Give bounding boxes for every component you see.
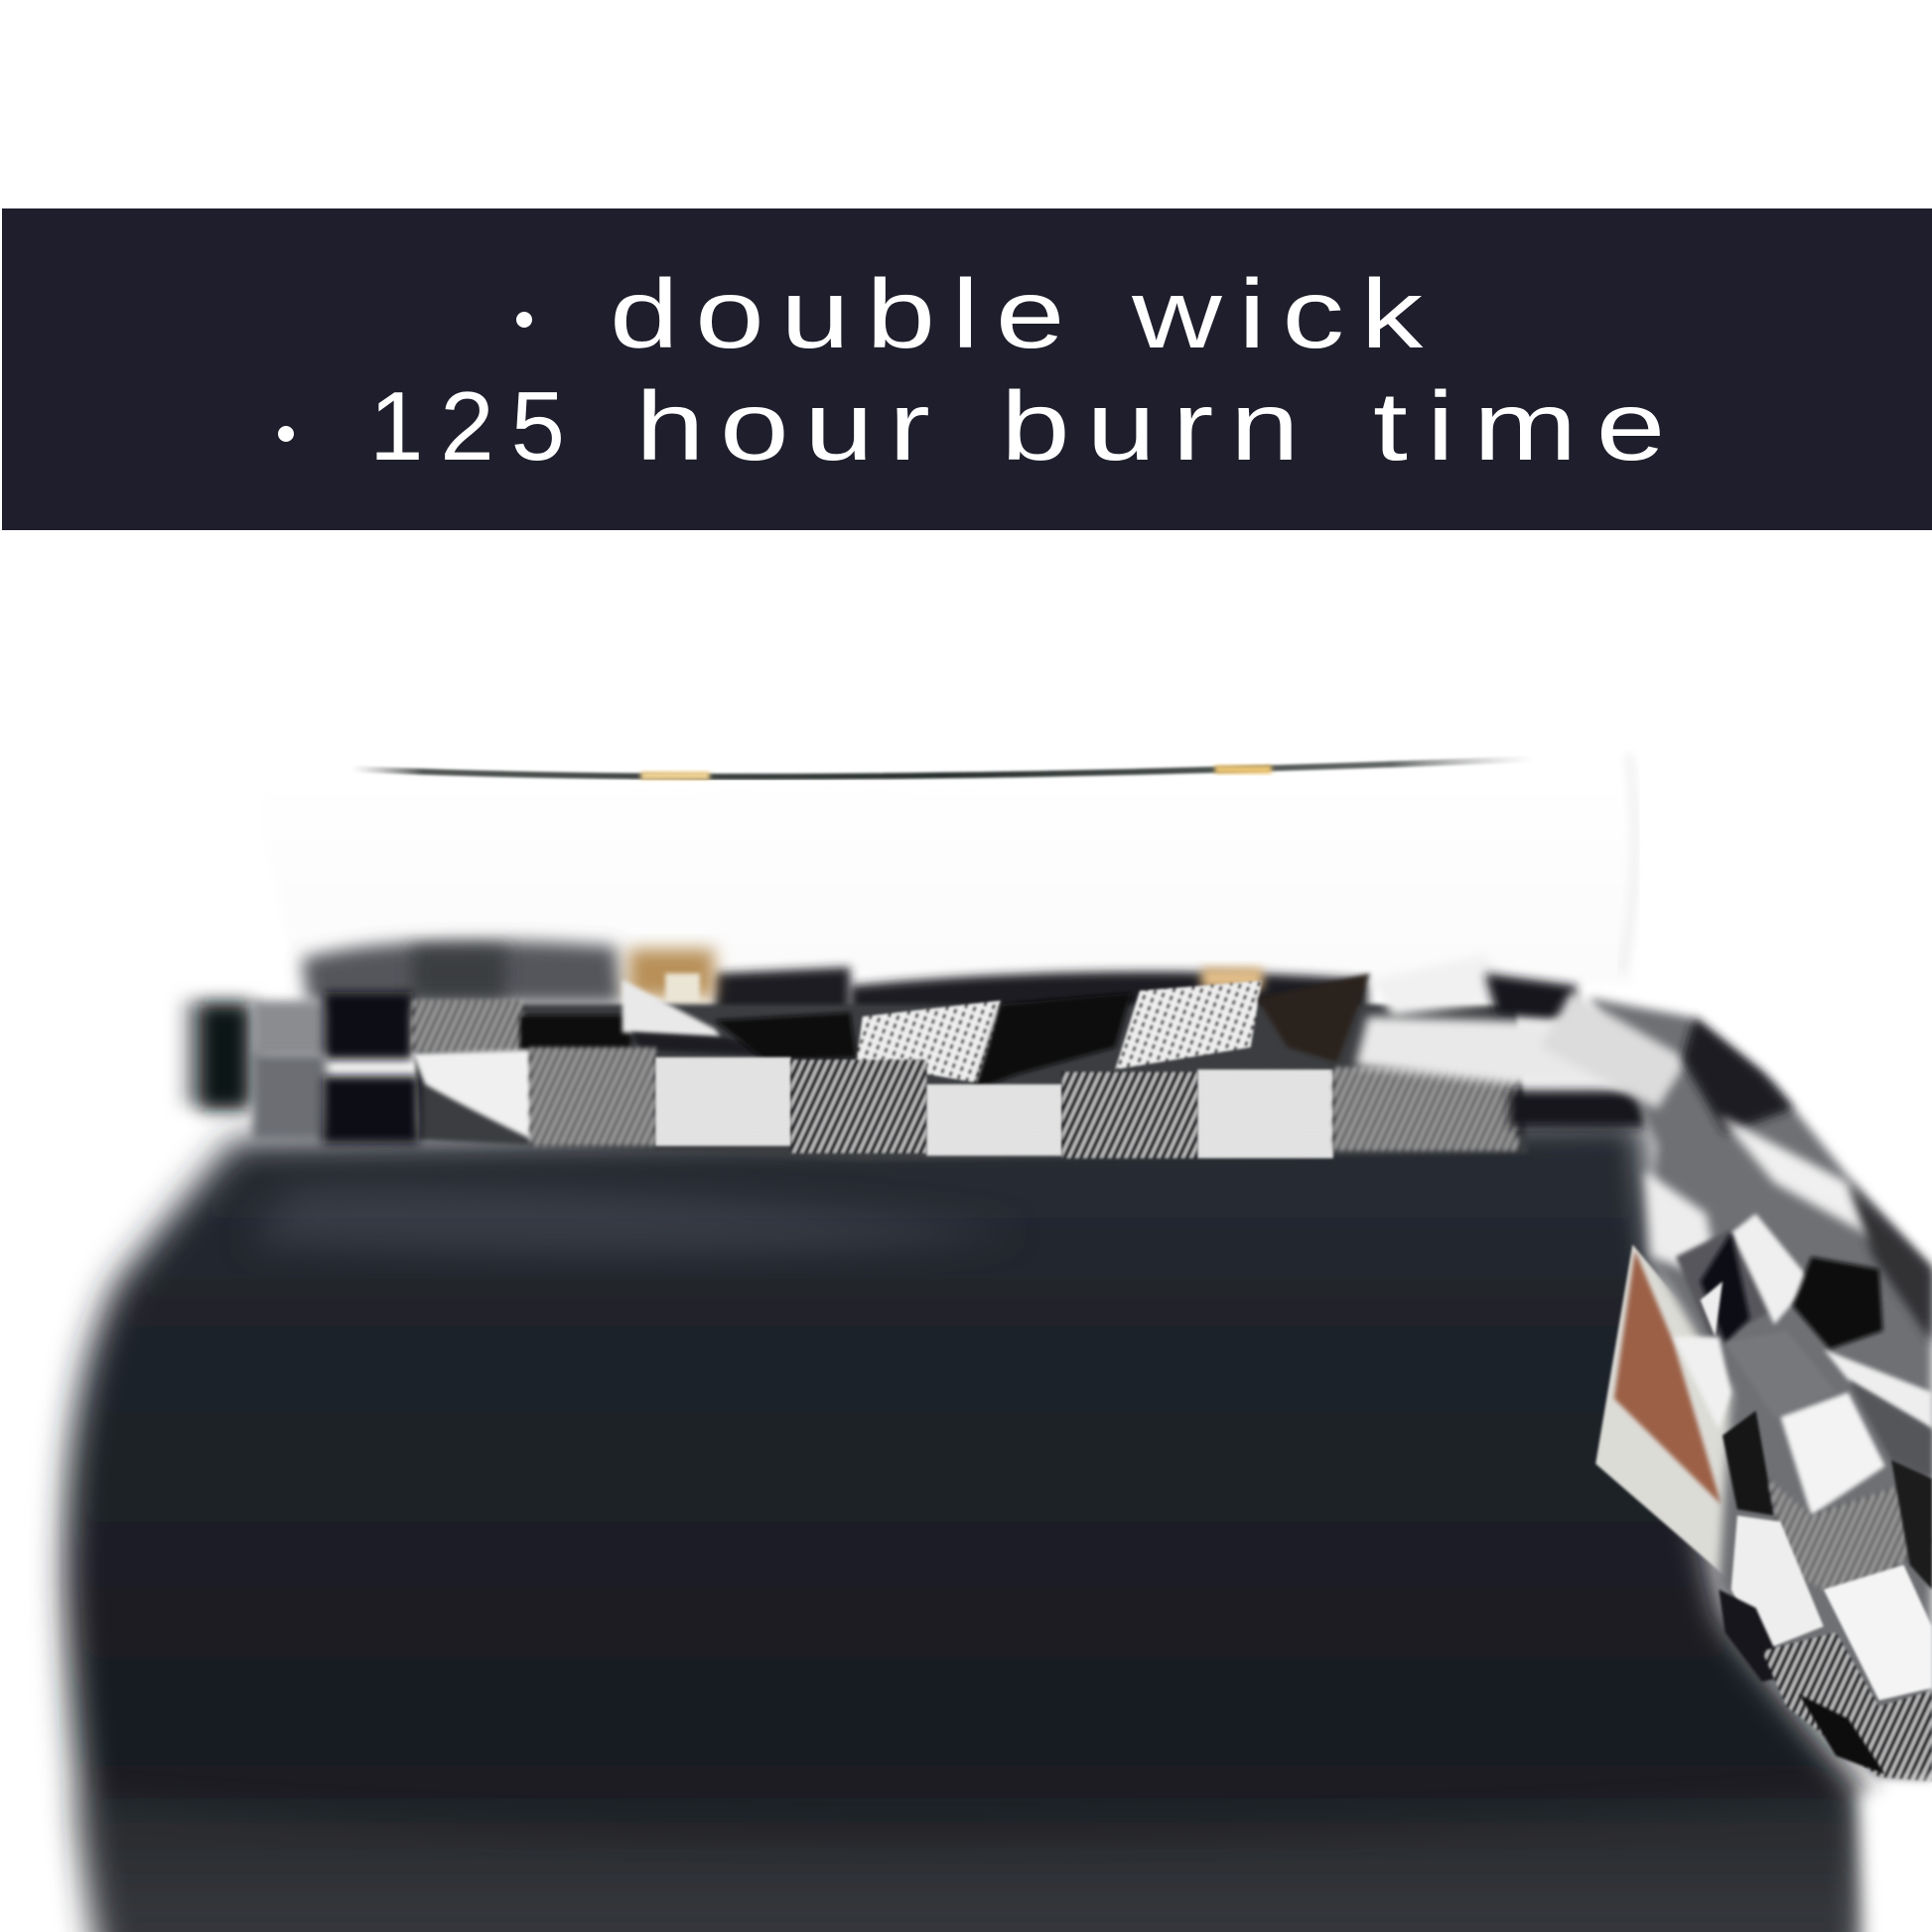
jar body bbox=[64, 1115, 1872, 1932]
jar rim line bbox=[351, 759, 1534, 776]
white vignette left and right bbox=[0, 1307, 1932, 1932]
caption band bbox=[2, 208, 1932, 530]
ribbon lower row bbox=[252, 1017, 1651, 1159]
ribbon band bbox=[183, 955, 1651, 1161]
ribbon upper row bbox=[183, 955, 1578, 1109]
line: 125 hour burn time: 125 bbox=[369, 371, 565, 481]
tail black check bbox=[1793, 1257, 1882, 1349]
wick flame glow left bbox=[640, 771, 710, 780]
line: 125 hour burn time: burn bbox=[1001, 371, 1300, 481]
candle jar photo bbox=[0, 750, 1932, 1932]
line: 125 hour burn time bbox=[278, 371, 1665, 481]
tag copper panel bbox=[1614, 1251, 1722, 1504]
line: 125 hour burn time: time bbox=[1373, 371, 1665, 481]
ribbon shadow base bbox=[413, 1004, 1528, 1161]
line: 125 hour burn time: hour bbox=[635, 371, 930, 481]
wax top smear bbox=[302, 940, 1368, 1035]
glass jar upper bbox=[246, 750, 1645, 986]
wick flame glow right bbox=[1215, 765, 1272, 773]
hang tag bbox=[1595, 1244, 1762, 1585]
ribbon tail bbox=[1540, 992, 1932, 1782]
line: double wick: double wick bbox=[610, 259, 1424, 368]
